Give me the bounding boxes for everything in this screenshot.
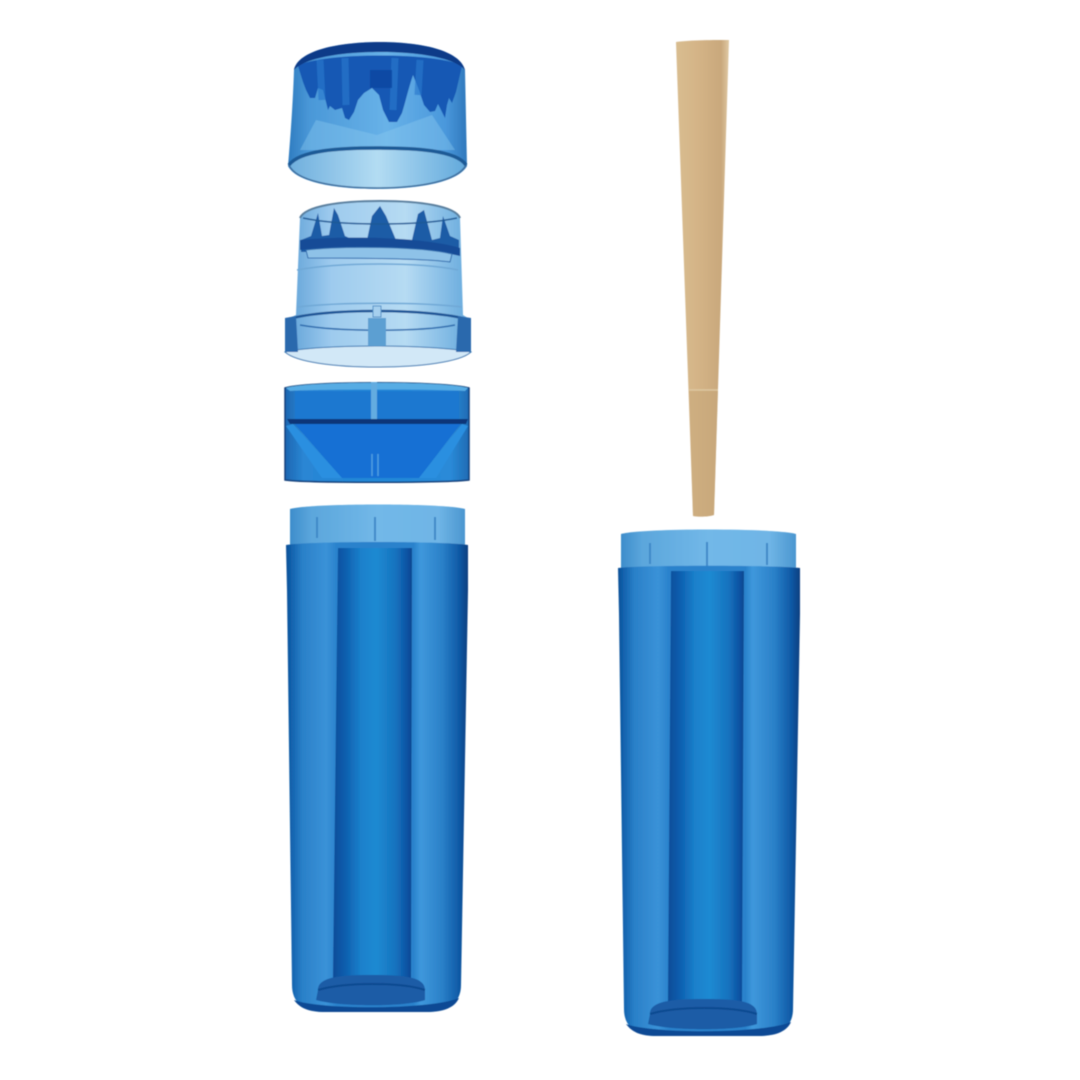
left tube body: [286, 542, 468, 1012]
grinder chamber: [285, 382, 469, 482]
right tube collar: [621, 530, 796, 570]
lid teeth: [298, 56, 462, 122]
left tube base: [316, 975, 425, 1005]
grinder middle section: [285, 201, 471, 367]
right storage tube: [618, 530, 800, 1036]
right tube inner column: [668, 571, 744, 1002]
lid light cone highlight: [300, 115, 455, 150]
paper cone: [676, 40, 729, 517]
middle collar: [286, 311, 470, 320]
left storage tube: [286, 504, 468, 1012]
grinder lid: [288, 42, 467, 189]
chamber funnel: [293, 422, 462, 478]
right tube base: [648, 999, 757, 1029]
left tube inner column: [333, 548, 412, 978]
left tube collar: [290, 504, 465, 546]
right tube body: [618, 566, 800, 1036]
middle teeth: [301, 206, 459, 252]
lid inner opening: [289, 148, 466, 188]
lid top rim: [294, 42, 465, 70]
